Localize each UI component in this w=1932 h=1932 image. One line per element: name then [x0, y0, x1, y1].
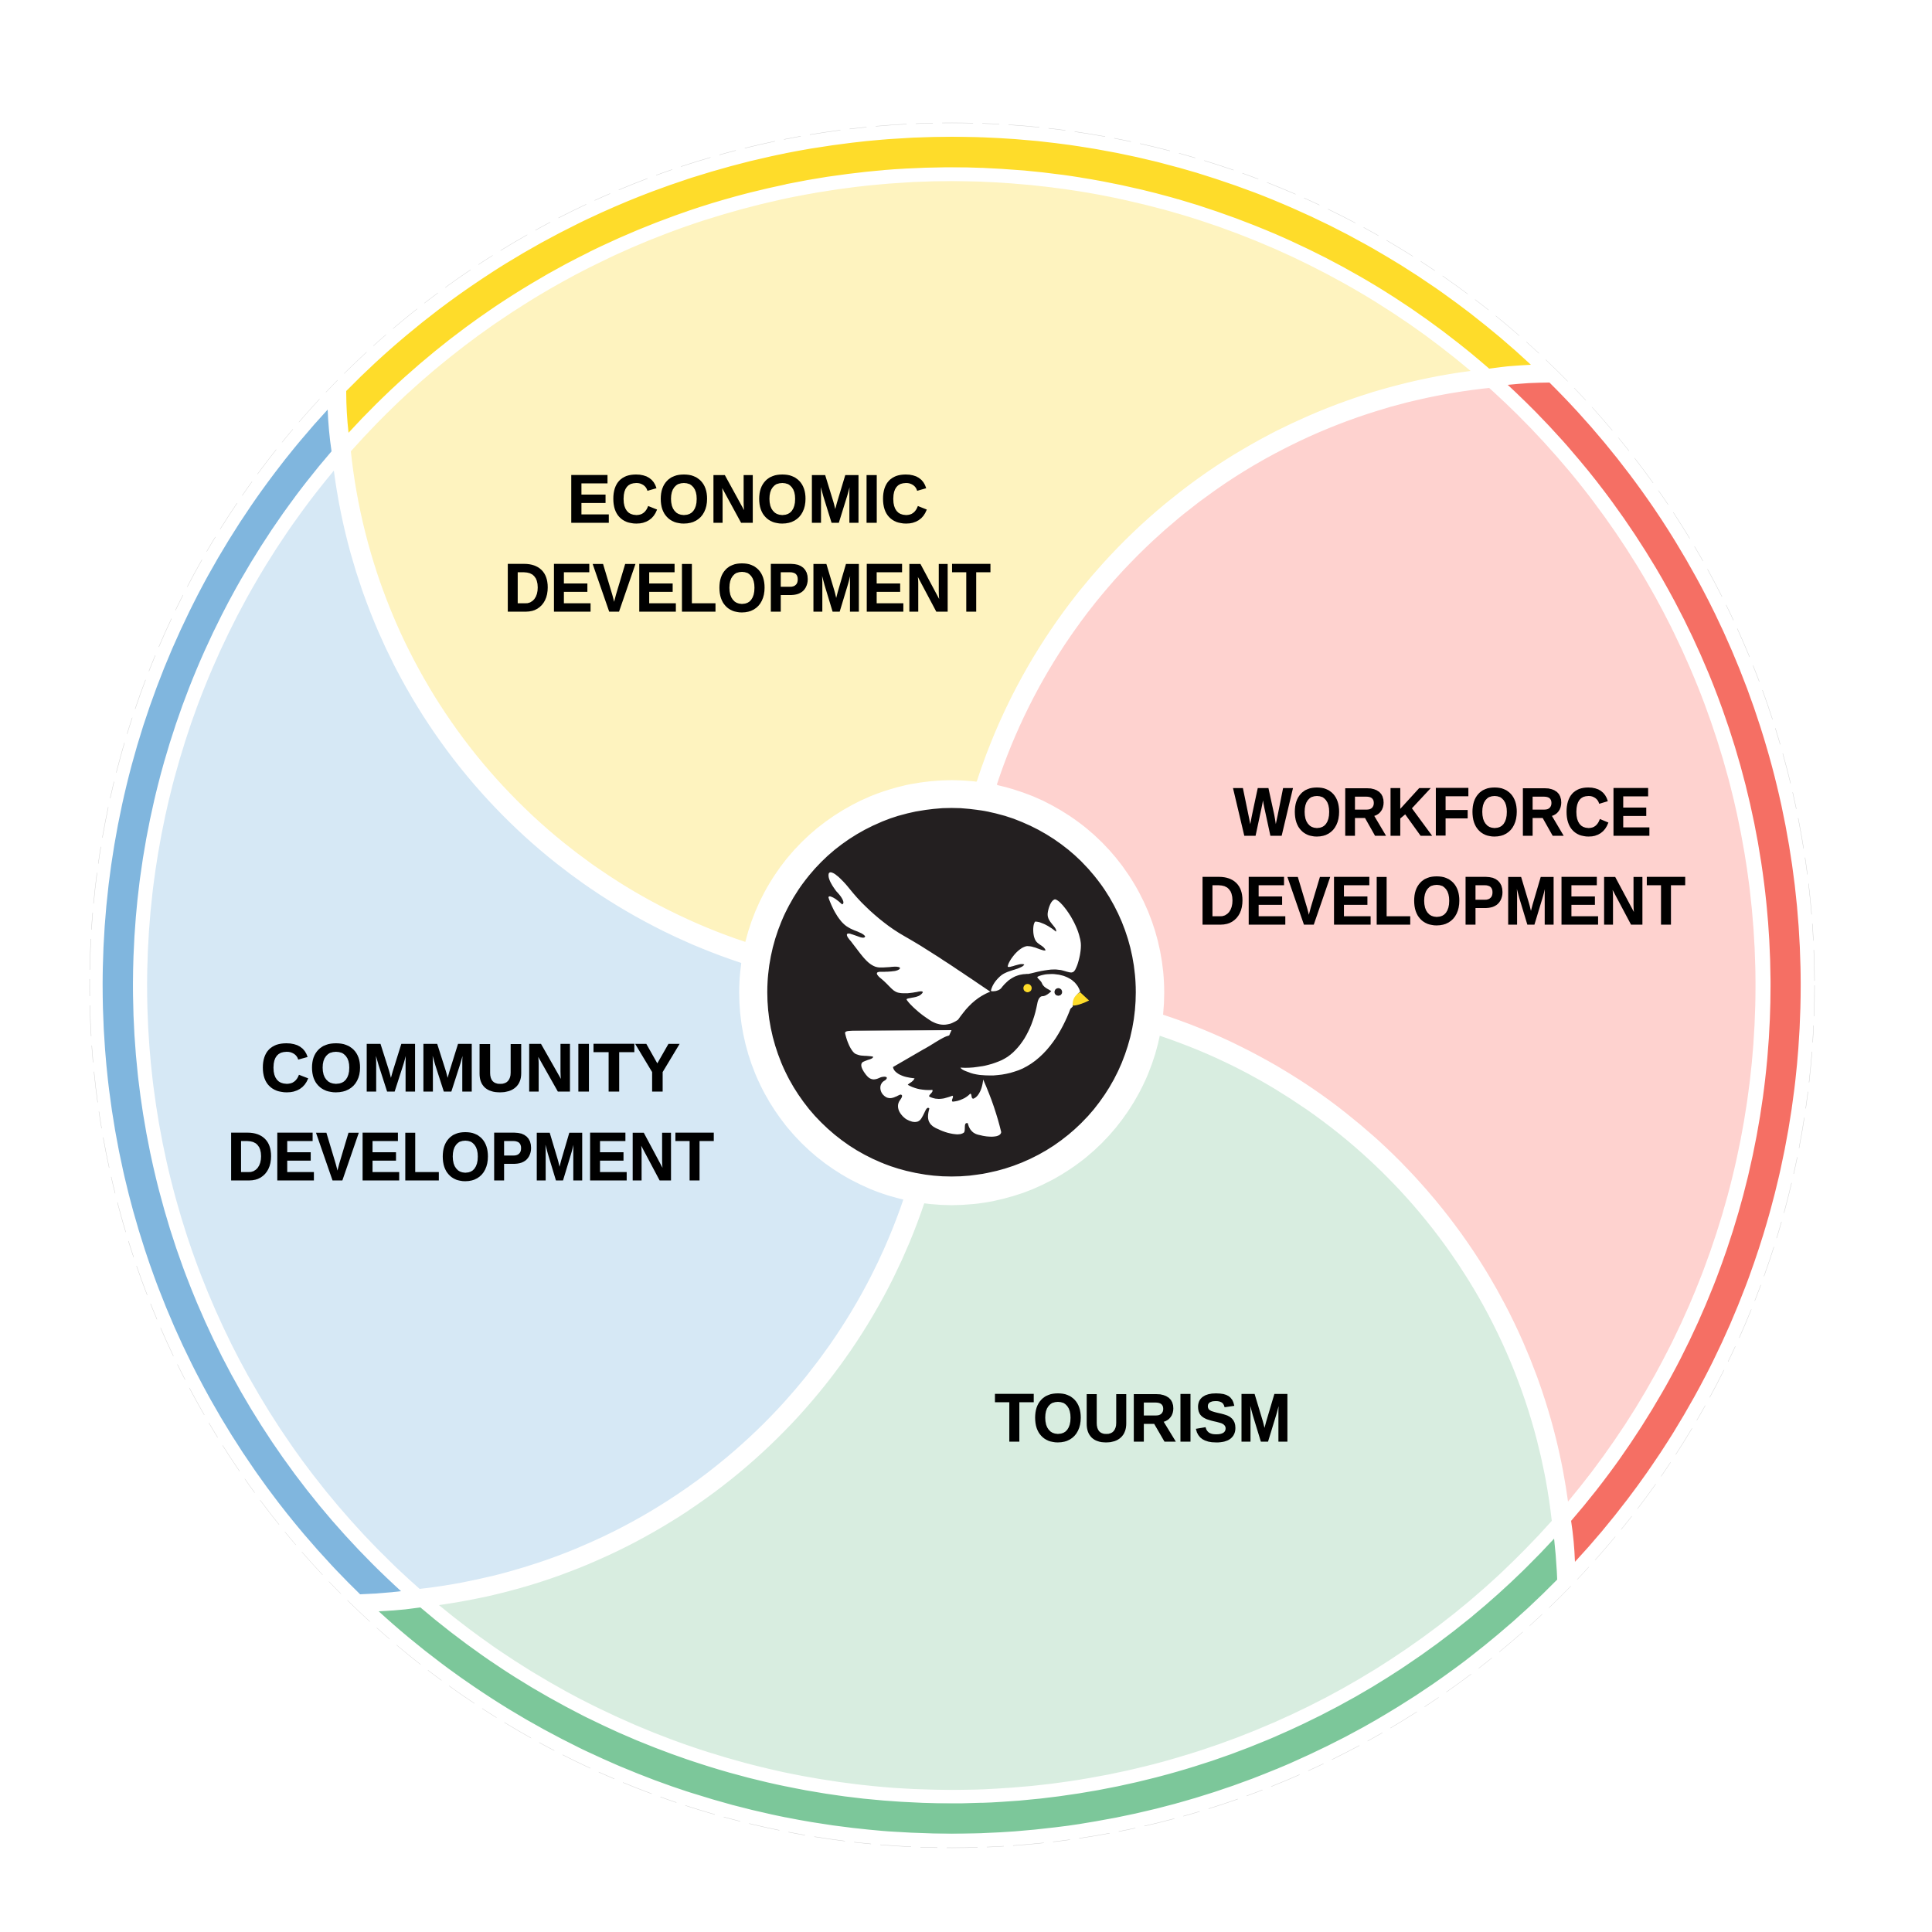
yellow dot	[1023, 984, 1032, 992]
dove head and chest	[961, 974, 1080, 1076]
panel: workforce development	[997, 383, 1801, 1562]
outer band: green	[379, 1539, 1557, 1834]
dove tail and lower wing	[845, 1030, 1002, 1137]
label: tourism: TOURISM	[995, 1379, 1291, 1456]
label: community development: COMMUNITY	[260, 1029, 680, 1106]
panel: economic development	[346, 137, 1531, 942]
label: economic development: DEVELOPMENT	[504, 549, 991, 626]
label: economic development	[504, 461, 991, 626]
outer band: yellow	[346, 137, 1531, 433]
label: community development: DEVELOPMENT	[227, 1118, 714, 1195]
label: workforce development: WORKFORCE	[1233, 774, 1651, 850]
petal: yellow	[351, 181, 1471, 942]
outer band: blue	[103, 410, 401, 1594]
center hub	[739, 781, 1164, 1206]
dove upper wing	[828, 872, 990, 1025]
panel: community development	[103, 410, 903, 1594]
label: workforce development	[1199, 774, 1685, 939]
label: workforce development: DEVELOPMENT	[1199, 862, 1685, 939]
petal: blue	[147, 471, 903, 1589]
dove eye	[1054, 988, 1062, 996]
dove beak	[1073, 992, 1089, 1005]
label: economic development: ECONOMIC	[567, 461, 928, 537]
panel: tourism	[379, 1036, 1557, 1834]
petal: green	[439, 1036, 1552, 1790]
icon: dove badge	[767, 808, 1136, 1176]
petal: pink	[997, 388, 1756, 1502]
outer band: red	[1508, 383, 1801, 1562]
dove far wing	[991, 900, 1081, 992]
label: community development	[227, 1029, 714, 1195]
